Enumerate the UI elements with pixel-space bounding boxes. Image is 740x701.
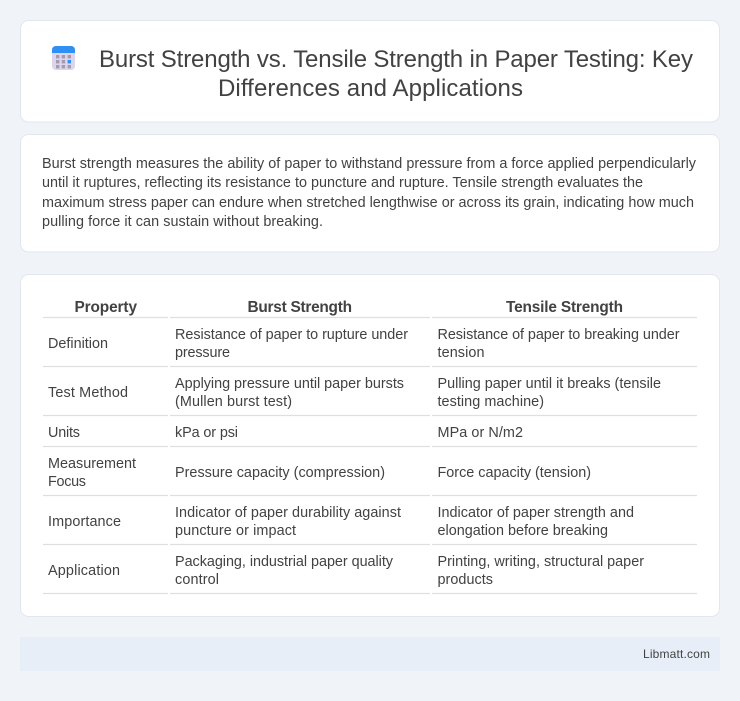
table row: application: Application: [48, 563, 120, 579]
footer: Libmatt.com: [643, 647, 710, 661]
table row: units: kPa or psi: [175, 425, 238, 441]
table row: application: products: [438, 572, 493, 588]
table row: units: [43, 425, 697, 446]
table row: definition: Resistance of paper to breaking under: [438, 327, 680, 343]
table row: application: [43, 554, 697, 594]
footer: [20, 637, 720, 671]
table row: importance: Importance: [48, 514, 121, 530]
table row: application: Packaging, industrial paper quality: [175, 554, 394, 570]
table row: importance: Indicator of paper strength and: [438, 505, 634, 521]
table row: measurement focus: Focus: [48, 474, 86, 490]
table row: definition: [43, 327, 697, 366]
panel: comparison table: [20, 274, 720, 616]
table header: Property: [74, 299, 137, 316]
table row: units: MPa or N/m2: [438, 425, 523, 441]
title: [99, 46, 693, 102]
table row: test method: Pulling paper until it breaks (tensile: [438, 376, 661, 392]
text block: summary paragraph: Burst strength measures the ability of paper to withstand pressure from a force applied perpendicularly: [42, 156, 697, 172]
table row: measurement focus: Force capacity (tension): [438, 465, 591, 481]
title: Burst Strength vs. Tensile Strength in Paper Testing: Key: [99, 46, 693, 73]
table row: test method: [43, 376, 697, 416]
table row: test method: (Mullen burst test): [175, 394, 292, 410]
text block: summary paragraph: pulling force it can sustain without breaking.: [42, 214, 323, 230]
table row: measurement focus: Measurement: [48, 456, 136, 472]
title: Differences and Applications: [218, 75, 523, 102]
table row: definition: pressure: [175, 345, 230, 361]
table row: importance: [43, 505, 697, 544]
table row: definition: Resistance of paper to rupture under: [175, 327, 408, 343]
table row: definition: Definition: [48, 336, 108, 352]
table row: application: Printing, writing, structural paper: [438, 554, 644, 570]
table header: [43, 299, 697, 318]
table row: units: Units: [48, 425, 80, 441]
table row: test method: Test Method: [48, 385, 128, 401]
table header: Burst Strength: [248, 299, 352, 316]
table row: measurement focus: [43, 456, 697, 496]
panel: summary: [20, 134, 720, 252]
panel: title header: [20, 20, 720, 122]
table row: test method: testing machine): [438, 394, 544, 410]
table row: definition: tension: [438, 345, 484, 361]
table row: measurement focus: Pressure capacity (compression): [175, 465, 385, 481]
text block: summary paragraph: maximum stress paper can endure when stretched lengthwise or across its grain, indicating how much: [42, 195, 694, 211]
table row: application: control: [175, 572, 219, 588]
table row: importance: puncture or impact: [175, 523, 296, 539]
text block: summary paragraph: [42, 156, 697, 230]
table row: importance: Indicator of paper durability against: [175, 505, 401, 521]
text block: summary paragraph: until it ruptures, reflecting its resistance to puncture and rupture. Tensile strength evaluates the: [42, 175, 643, 191]
icon: calendar: [52, 46, 75, 70]
table row: importance: elongation before breaking: [438, 523, 608, 539]
table header: Tensile Strength: [506, 299, 623, 316]
table row: test method: Applying pressure until paper bursts: [175, 376, 404, 392]
